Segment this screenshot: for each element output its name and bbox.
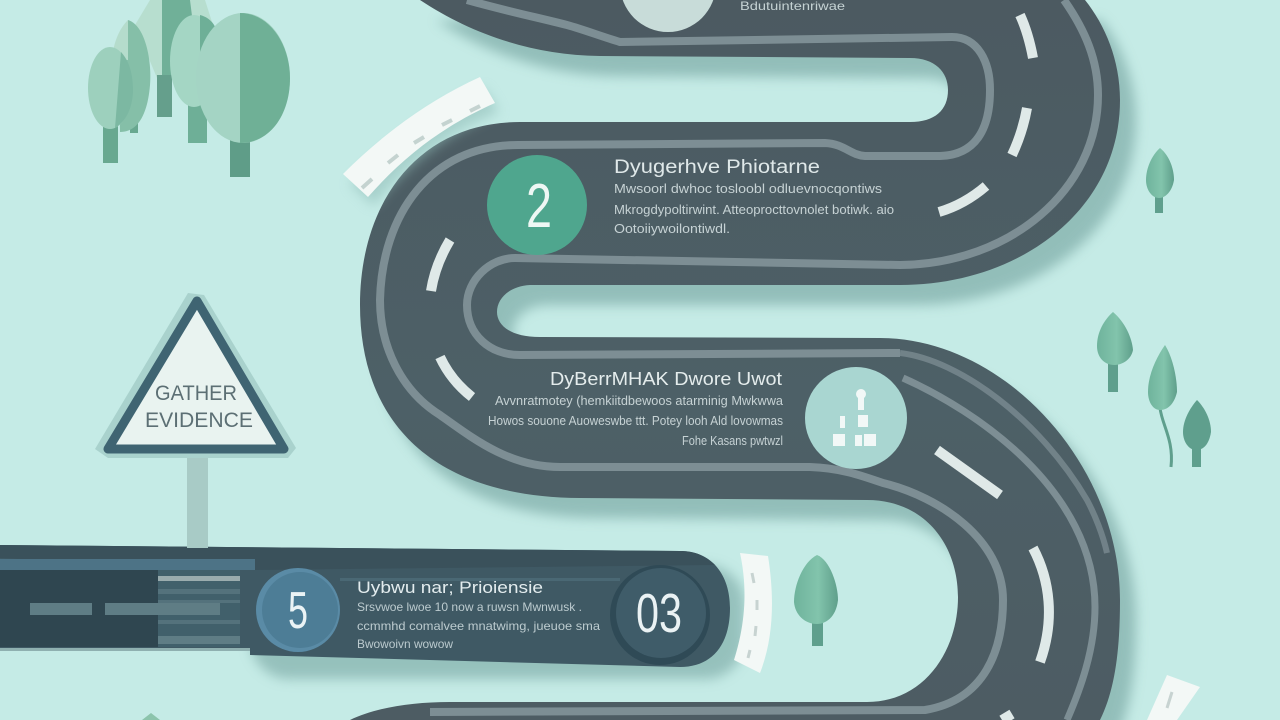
bar step text: Srsvwoe lwoe 10 now a ruwsn Mwnwusk . (357, 600, 582, 614)
tree cluster top left (88, 0, 290, 177)
bar badge 03: 03 (636, 582, 682, 644)
step 2 text: Mwsoorl dwhoc tosloobl odluevnocqontiws (614, 181, 883, 196)
step 2 text: Dyugerhve Phiotarne (614, 157, 820, 178)
small tree right 4 (1183, 400, 1211, 467)
bar step text: Uybwu nar; Prioiensie (357, 578, 543, 597)
bar badge 03 (610, 565, 710, 665)
step 3 badge with people icon (805, 367, 907, 469)
road sign gather evidence (95, 293, 296, 548)
bar step text: Bwowoivn wowow (357, 637, 453, 651)
road (350, 0, 1120, 720)
road sign gather evidence: GATHER (155, 382, 237, 405)
road lane lines (380, 0, 1107, 720)
white road strip top left (343, 77, 499, 206)
tree tip bottom (142, 713, 160, 720)
bottom bar shadow (250, 565, 745, 679)
bar step text (357, 578, 600, 651)
step 2 text: Mkrogdypoltirwint. Atteoprocttovnolet botiwk. aio (614, 202, 894, 217)
step 2 badge: 2 (526, 172, 552, 241)
white road strip bottom right (1147, 675, 1200, 720)
step 3 text: DyBerrMHAK Dwore Uwot (550, 369, 782, 389)
white road strip by bar (734, 553, 772, 673)
step 2 text (614, 157, 894, 236)
top step badge (620, 0, 716, 32)
bar step text: ccmmhd comalvee mnatwimg, jueuoe sma (357, 619, 600, 633)
small tree right 3 (1148, 345, 1177, 467)
step 3 text (488, 369, 784, 448)
step 3 text: Howos souone Auoweswbe ttt. Potey looh Ald lovowmas (488, 413, 783, 428)
step 3 text: Fohe Kasans pwtwzl (682, 433, 783, 448)
small tree right 2 (1097, 312, 1133, 392)
step 2 text: Ootoiiywoilontiwdl. (614, 221, 730, 236)
tree beside bar (794, 555, 838, 646)
bar badge 5 (256, 568, 340, 652)
step 3 text: Avvnratmotey (hemkiitdbewoos atarminig Mwkwwa (495, 393, 784, 408)
road sign gather evidence: EVIDENCE (145, 409, 253, 432)
road shadow (366, 20, 1136, 720)
bottom bar (0, 545, 730, 667)
step 2 badge (487, 155, 587, 255)
bar badge 5: 5 (288, 582, 308, 640)
road centre dashes (431, 15, 1049, 720)
small tree right 1 (1146, 148, 1174, 213)
